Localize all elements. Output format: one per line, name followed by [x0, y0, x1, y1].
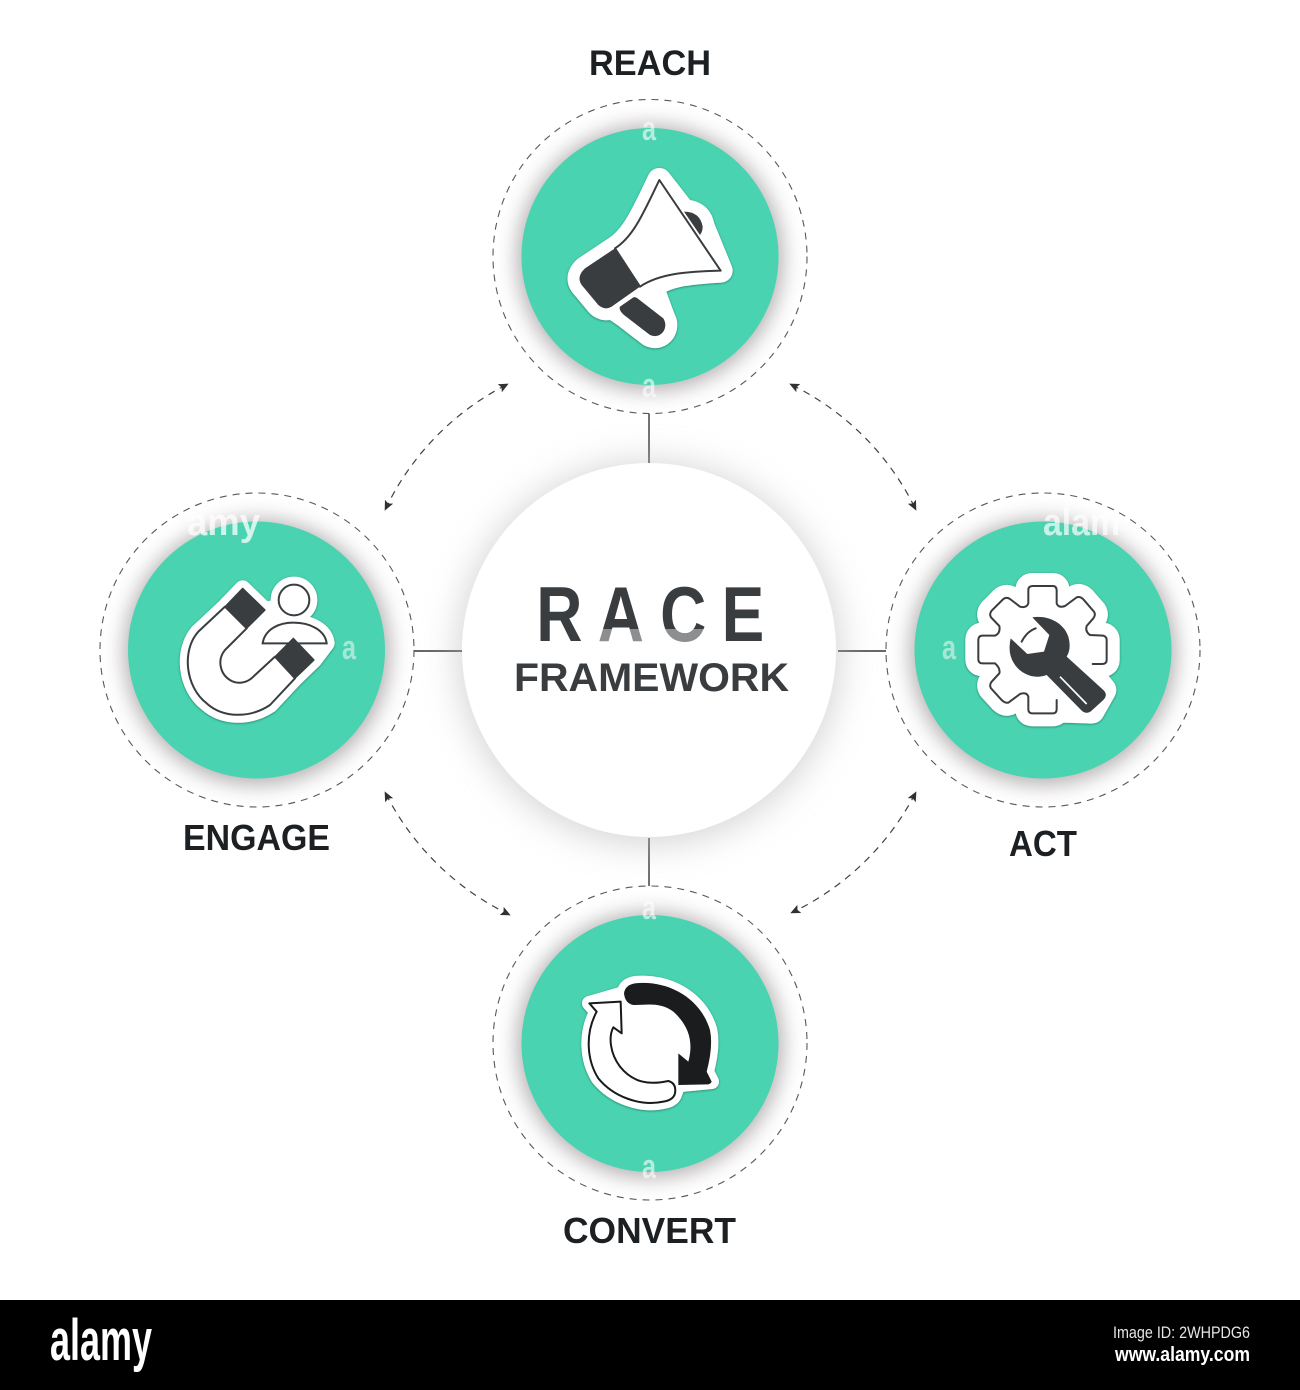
icon: magnet attracting person [188, 585, 327, 715]
node: Reach: a [642, 110, 657, 148]
node: Reach [493, 100, 807, 414]
node: Engage [100, 493, 414, 807]
label: ENGAGE: ENGAGE [183, 817, 330, 858]
central hub [459, 463, 839, 843]
watermark band over RACE [594, 629, 710, 642]
dashed two-way arrows between nodes [386, 385, 915, 914]
icon: gear and wrench [978, 586, 1107, 713]
icon: circular arrows [589, 983, 712, 1103]
footer bar [0, 1300, 1300, 1390]
label: REACH: REACH [589, 44, 711, 83]
node: Reach: a [642, 367, 657, 405]
node: Act [886, 493, 1200, 807]
node: Act: a [942, 629, 957, 667]
hub title: FRAMEWORK: FRAMEWORK [514, 656, 789, 700]
node: Act: alam [1043, 502, 1120, 544]
node: Convert [493, 886, 807, 1200]
node: Convert: a [642, 1148, 657, 1186]
node: Engage: amy [187, 502, 260, 544]
footer logo: alamy: alamy [50, 1308, 152, 1373]
footer image id: Image ID: 2WHPDG6 [1113, 1323, 1250, 1342]
label: CONVERT: CONVERT [563, 1210, 736, 1251]
hub title: RACE: RACE [536, 571, 764, 658]
node: Convert: a [642, 889, 657, 927]
footer url: www.alamy.com [1114, 1344, 1250, 1366]
label: ACT: ACT [1009, 823, 1077, 864]
node: Engage: a [342, 629, 357, 667]
icon: megaphone [579, 180, 721, 336]
connector lines from hub to nodes [414, 414, 886, 886]
